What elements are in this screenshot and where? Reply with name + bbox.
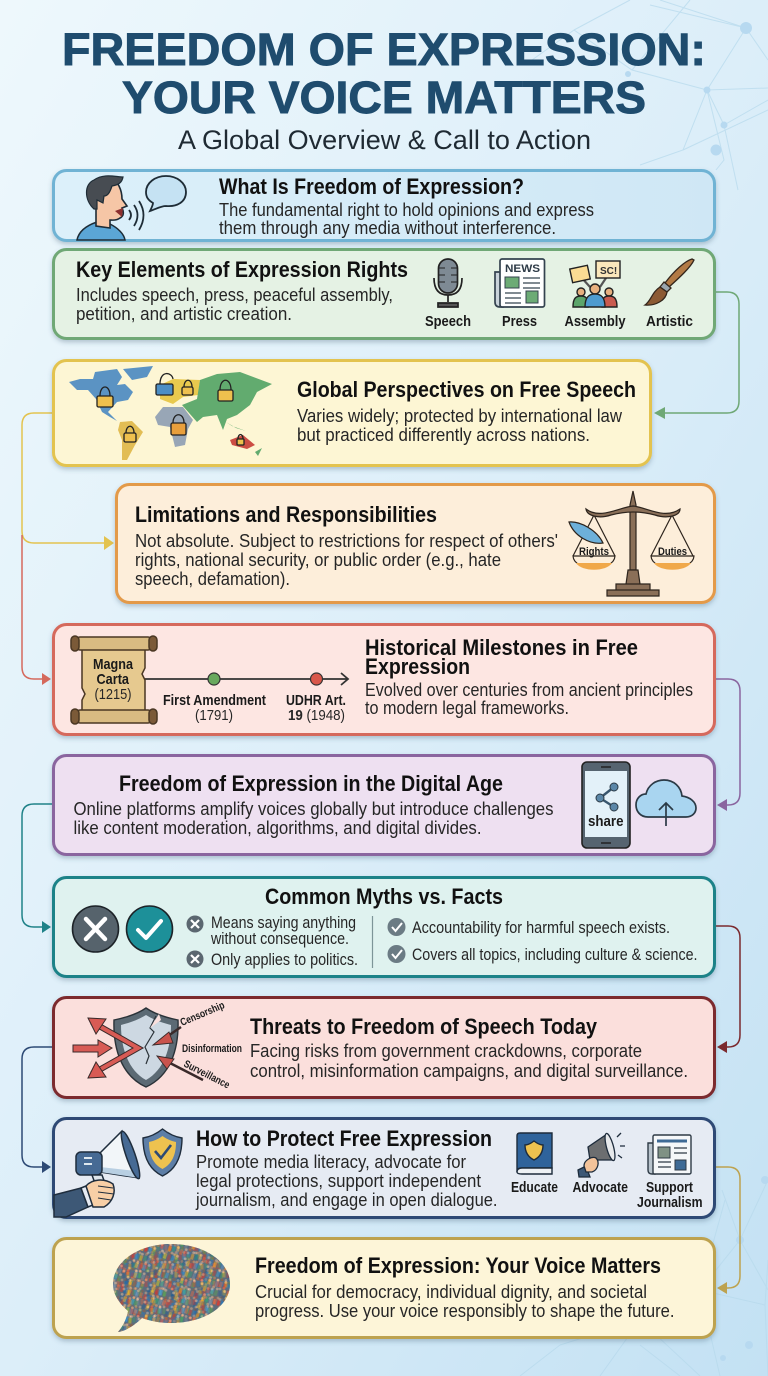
icon: crowd speech bubble	[113, 1244, 230, 1332]
body text: Facing risks from government crackdowns, corporate	[250, 1041, 642, 1061]
icon labels: Speech	[425, 313, 471, 330]
network nodes	[625, 22, 768, 1361]
body text	[297, 406, 623, 445]
icon labels: Assembly	[564, 313, 626, 330]
arrow: green connector	[654, 292, 739, 419]
body text: journalism, and engage in open dialogue.	[195, 1190, 498, 1210]
icon labels	[511, 1179, 702, 1211]
heading: Global Perspectives on Free Speech	[297, 377, 636, 402]
icon: scroll	[71, 636, 157, 724]
body text	[135, 531, 558, 589]
milestone: first amendment: First Amendment	[163, 692, 266, 709]
heading: Key Elements of Expression Rights	[76, 257, 408, 282]
threat labels: Surveillance	[182, 1058, 232, 1091]
milestone: UDHR	[286, 692, 346, 724]
panel: how to protect	[54, 1118, 714, 1218]
myths list: Only applies to politics.	[211, 951, 358, 969]
icon: assembly	[570, 261, 620, 307]
body text	[219, 200, 594, 238]
body text	[255, 1282, 674, 1321]
arrow: red connector	[22, 535, 51, 685]
heading: Threats to Freedom of Speech Today	[250, 1014, 598, 1039]
icon: microphone	[434, 259, 462, 307]
threat labels	[178, 999, 242, 1091]
icon labels: Artistic	[646, 313, 693, 330]
heading: Common Myths vs. Facts	[265, 884, 503, 909]
body text: but practiced differently across nations.	[297, 425, 590, 445]
icon: world map with locks	[69, 366, 272, 460]
body text: Online platforms amplify voices globally but introduce challenges	[74, 799, 554, 819]
icon: cracked shield with arrows	[73, 1008, 203, 1087]
icon: paint brush	[645, 259, 694, 305]
heading	[365, 635, 638, 679]
scroll label	[93, 656, 134, 703]
icon: smartphone share: share	[588, 813, 624, 830]
panel: what is freedom of expression	[54, 170, 714, 240]
icon: shield check	[143, 1129, 182, 1176]
icon: book	[517, 1133, 552, 1174]
body text: Evolved over centuries from ancient principles	[365, 680, 693, 700]
body text: like content moderation, algorithms, and digital divides.	[74, 818, 482, 838]
icon: small newspaper	[648, 1135, 691, 1174]
body text: to modern legal frameworks.	[365, 698, 569, 718]
heading: What Is Freedom of Expression?	[219, 174, 524, 199]
icon: newspaper	[495, 259, 544, 307]
milestone: UDHR: UDHR Art.	[286, 692, 346, 709]
body text: Includes speech, press, peaceful assembly,	[76, 285, 393, 305]
panel: historical milestones	[54, 624, 714, 734]
panel: global perspectives	[54, 360, 650, 466]
arrow: purple connector	[716, 679, 740, 811]
heading: Limitations and Responsibilities	[135, 502, 437, 527]
scroll label: Carta	[96, 671, 130, 688]
icon: speaking person	[77, 176, 186, 240]
icon labels	[425, 313, 693, 330]
arrow: teal connector	[22, 804, 52, 933]
subtitle: A Global Overview & Call to Action	[178, 125, 591, 155]
body text: Crucial for democracy, individual dignity, and societal	[255, 1282, 647, 1302]
body text: control, misinformation campaigns, and digital surveillance.	[250, 1061, 688, 1081]
body text	[250, 1041, 688, 1081]
milestone: first amendment: (1791)	[195, 707, 233, 724]
myths list: Means saying anything	[211, 914, 356, 932]
body text: speech, defamation).	[135, 569, 290, 589]
body text	[365, 680, 693, 718]
icon: small megaphone	[578, 1133, 625, 1177]
threat labels: Disinformation	[182, 1043, 242, 1055]
icon: newspaper: NEWS	[505, 263, 540, 275]
icon: cloud upload	[636, 780, 696, 826]
scroll label: (1215)	[94, 686, 132, 703]
body text: rights, national security, or public order (e.g., hate	[135, 550, 501, 570]
heading: Historical Milestones in Free	[365, 635, 638, 660]
icon labels: Advocate	[572, 1179, 628, 1196]
arrow: gold connector	[716, 1167, 740, 1294]
icon labels: Press	[502, 313, 537, 330]
icon labels: Journalism	[637, 1194, 702, 1211]
icon: scales: Rights	[579, 546, 609, 558]
panel: your voice matters	[54, 1238, 714, 1338]
body text: Varies widely; protected by international law	[297, 406, 623, 426]
milestone: UDHR: 19 (1948)	[288, 707, 345, 724]
panel: threats	[54, 998, 714, 1098]
body text	[195, 1152, 498, 1210]
body text: progress. Use your voice responsibly to shape the future.	[255, 1301, 674, 1321]
icon: scales	[569, 491, 694, 596]
body text: Not absolute. Subject to restrictions for respect of others'	[135, 531, 558, 551]
milestone: first amendment	[163, 692, 266, 724]
title: YOUR VOICE MATTERS	[122, 72, 646, 123]
heading: Freedom of Expression: Your Voice Matters	[255, 1253, 661, 1278]
icon labels: Support	[646, 1179, 693, 1196]
arrow: yellow connector	[22, 413, 114, 550]
panel: key elements	[54, 250, 714, 338]
icon: fact check	[126, 906, 172, 952]
arrow: maroon connector	[716, 926, 740, 1053]
icon labels: Educate	[511, 1179, 558, 1196]
body text	[74, 799, 554, 838]
body text: them through any media without interference.	[219, 218, 556, 238]
heading: Freedom of Expression in the Digital Age	[119, 771, 503, 796]
icon: scales: Duties	[658, 546, 687, 558]
facts list: Covers all topics, including culture & science.	[412, 946, 698, 964]
title: FREEDOM OF EXPRESSION:	[62, 24, 706, 75]
panel: digital age	[54, 756, 714, 854]
panel: myths vs facts	[54, 878, 714, 976]
body text: petition, and artistic creation.	[76, 304, 292, 324]
timeline	[140, 673, 348, 685]
myths list	[186, 914, 358, 969]
body text	[76, 285, 393, 324]
scroll label: Magna	[93, 656, 134, 673]
arrow: navy connector	[22, 1047, 52, 1173]
network pattern	[520, 0, 768, 1376]
myths list: without consequence.	[210, 930, 349, 948]
panel: limitations and responsibilities	[116, 484, 714, 602]
heading: How to Protect Free Expression	[196, 1126, 492, 1151]
body text: Promote media literacy, advocate for	[196, 1152, 466, 1172]
body text: legal protections, support independent	[196, 1171, 481, 1191]
facts list: Accountability for harmful speech exists.	[412, 919, 670, 937]
icon: smartphone share	[582, 762, 630, 848]
icon: assembly: SC!	[600, 266, 617, 277]
icon: myth cross	[72, 906, 118, 952]
icon: hand with megaphone	[54, 1130, 143, 1217]
heading: Expression	[365, 654, 470, 679]
title	[62, 24, 706, 123]
icon: padlocks	[97, 374, 244, 445]
threat labels: Censorship	[178, 999, 226, 1029]
body text: The fundamental right to hold opinions and express	[219, 200, 594, 220]
facts list	[388, 918, 698, 964]
